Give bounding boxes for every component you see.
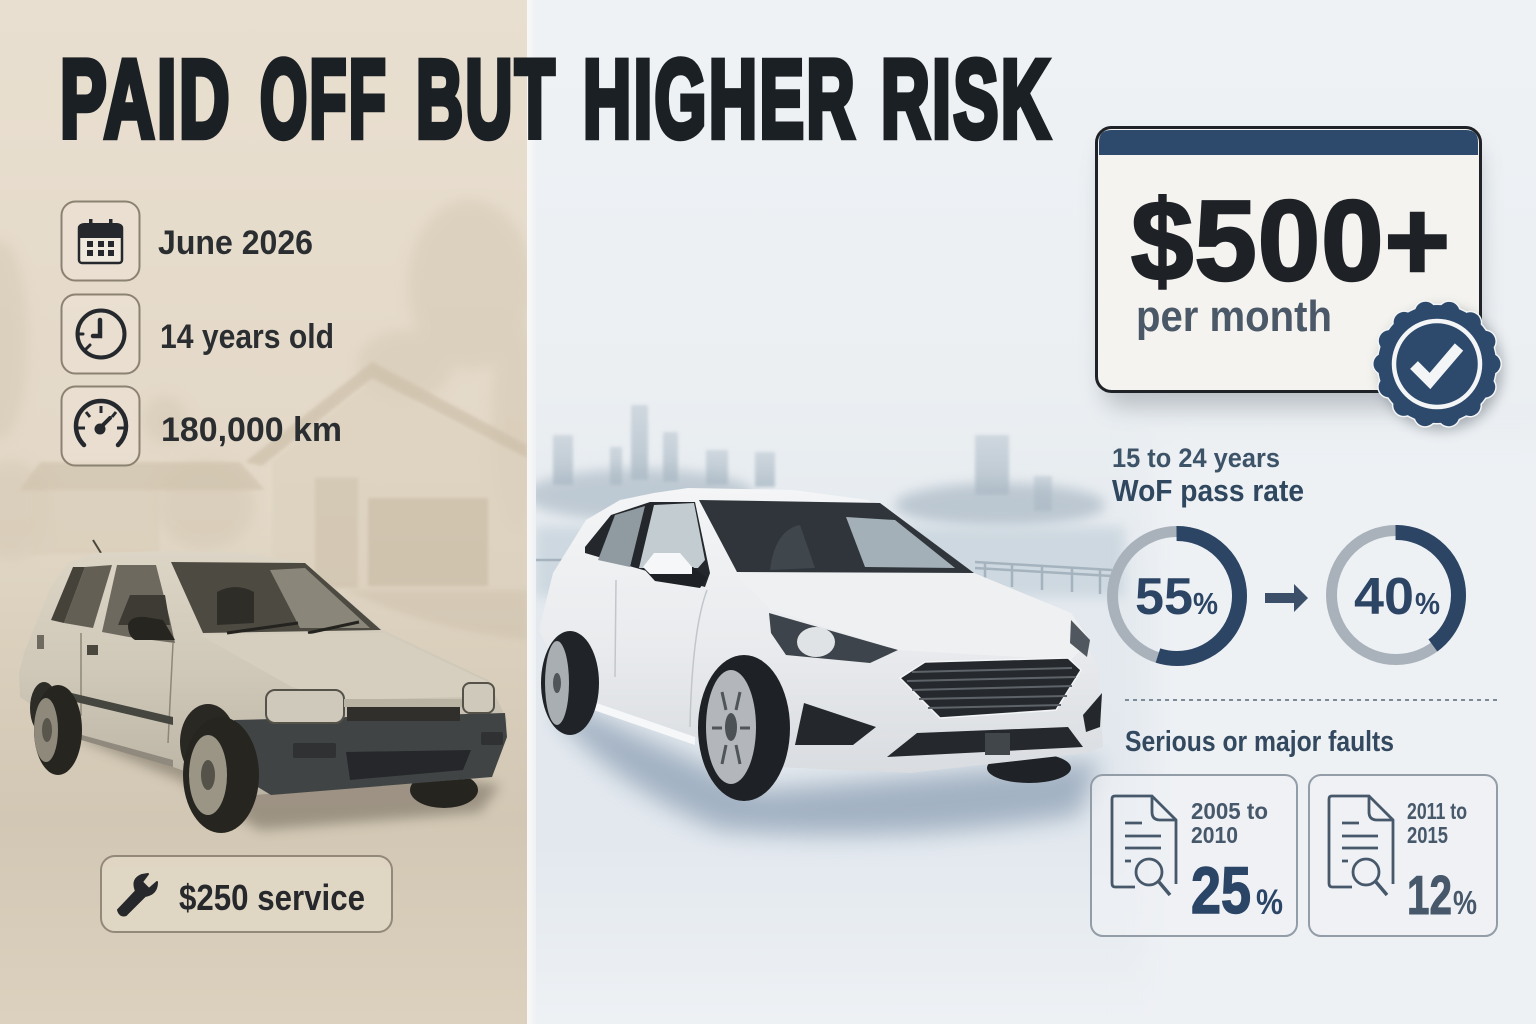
- heading: WoF pass rate: 15 to 24 years: [1112, 443, 1280, 473]
- panel: faults 2011 to 2015: 12: [1407, 864, 1452, 926]
- windshield: [171, 562, 381, 633]
- front bumper: [234, 713, 507, 795]
- windshield: [699, 500, 974, 573]
- sill: [579, 697, 695, 745]
- arrow: pass rate falls: [1265, 584, 1308, 612]
- door lines: [615, 580, 707, 727]
- background: sepia house: [20, 362, 527, 590]
- background: misty skyline: [553, 405, 1052, 511]
- side windows: [598, 506, 645, 567]
- door lines and handle: [81, 633, 173, 743]
- panel: faults 2005 to 2010: [1091, 775, 1297, 936]
- illustration: old beige hatchback: [19, 540, 507, 833]
- background: pale wash behind the stats: [1160, 532, 1536, 900]
- rear wheel: [34, 685, 82, 775]
- illustration: new white hatchback: [539, 488, 1103, 801]
- background: tree line: [525, 469, 755, 521]
- fact: 180,000 km: [62, 386, 342, 466]
- front wheel: [183, 717, 259, 833]
- chart: donut 55%: %: [1193, 586, 1218, 621]
- panel: new car background: [536, 404, 1140, 900]
- body: [539, 488, 1103, 773]
- ground shadow: [70, 735, 500, 830]
- callout: service cost: $250 service: [179, 877, 365, 918]
- icon: wrench: [118, 874, 157, 915]
- panel: faults 2005 to 2010: %: [1256, 883, 1283, 922]
- panel: faults 2011 to 2015: [1309, 775, 1497, 936]
- panel: faults 2011 to 2015: 2011 to: [1407, 798, 1467, 824]
- panel: faults 2011 to 2015: %: [1453, 884, 1477, 921]
- title: PAID: [60, 38, 232, 161]
- background: driveway: [362, 593, 525, 634]
- title: HIGHER: [583, 38, 857, 161]
- antenna: [93, 540, 101, 553]
- window frame: [585, 502, 710, 587]
- mirror: [128, 617, 175, 640]
- chart: donut 40%: %: [1415, 586, 1440, 621]
- card: $500+ per month: [1096, 128, 1480, 407]
- fact: 180,000 km: 180,000 km: [161, 411, 342, 449]
- mirror: [643, 567, 707, 588]
- chart: donut 40%: 40: [1354, 568, 1414, 626]
- title: OFF: [260, 38, 388, 161]
- background: water: [535, 527, 1125, 597]
- title: [60, 38, 1052, 161]
- background: car shadow on the road: [560, 700, 1100, 835]
- icon: document with magnifier: [1329, 796, 1393, 895]
- side trim: [59, 690, 173, 725]
- far front wheel: [987, 753, 1071, 783]
- card header bar: [1099, 130, 1478, 155]
- title: BUT: [416, 38, 557, 161]
- fact: 14 years old: 14 years old: [160, 318, 334, 356]
- panel: faults 2005 to 2010: 25: [1191, 853, 1251, 927]
- icon: document with magnifier: [1112, 796, 1176, 895]
- headlight: [769, 613, 898, 663]
- panel: faults 2011 to 2015: 2015: [1407, 822, 1448, 848]
- far front wheel: [410, 772, 478, 808]
- panel: faults 2005 to 2010: 2005 to: [1191, 798, 1268, 824]
- sill: [71, 732, 173, 767]
- fact: June 2026: [62, 202, 313, 280]
- front wheel: [698, 655, 790, 801]
- icon: calendar: [79, 219, 122, 263]
- background: railing: [535, 560, 1112, 594]
- fog lamps: [795, 703, 876, 745]
- grille: [344, 699, 462, 707]
- icon: clock: [77, 310, 124, 358]
- lower intake: [887, 727, 1083, 757]
- background: sepia trees: [0, 200, 539, 560]
- body: [19, 551, 507, 795]
- panel: old car background: [0, 0, 539, 1024]
- card: $500+ per month: per month: [1136, 292, 1332, 341]
- card: $500+ per month: $500+: [1131, 178, 1451, 305]
- divider between panels: [527, 0, 536, 1024]
- chart: donut 40%: [1332, 530, 1460, 660]
- hood: [735, 573, 1090, 660]
- rear wheel: [541, 631, 599, 735]
- grille: [900, 658, 1081, 718]
- hood: [200, 633, 488, 700]
- fact: June 2026: June 2026: [158, 224, 313, 262]
- panel: faults 2005 to 2010: 2010: [1191, 822, 1238, 848]
- fact: 14 years old: [62, 294, 334, 374]
- heading: WoF pass rate: [1112, 443, 1304, 508]
- heading: WoF pass rate: WoF pass rate: [1112, 473, 1304, 508]
- chart: donut 55%: [1112, 532, 1242, 660]
- title: RISK: [881, 38, 1052, 161]
- chart: donut 55%: 55: [1135, 568, 1193, 626]
- icon: speedometer: [76, 401, 126, 445]
- heading: serious or major faults: Serious or major faults: [1125, 726, 1394, 758]
- side windows: [51, 567, 85, 623]
- icon: verified badge: [1376, 304, 1503, 431]
- headlights: [266, 690, 344, 723]
- wheel arches: [30, 682, 58, 734]
- callout: service cost: [101, 856, 392, 932]
